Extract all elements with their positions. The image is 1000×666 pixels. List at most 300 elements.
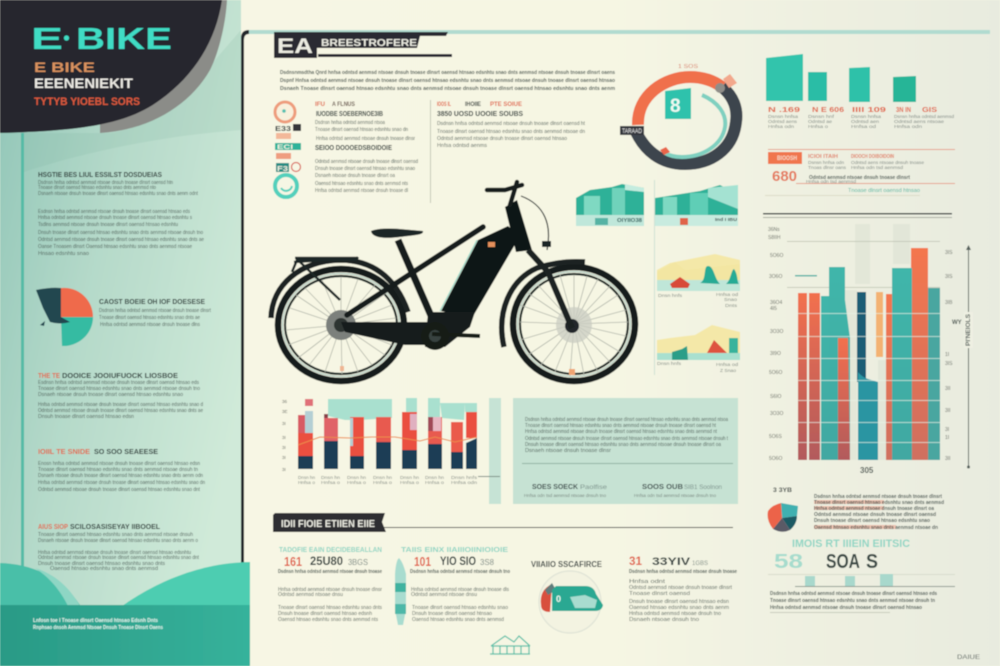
stat column 2: 3S8 [480, 558, 495, 567]
text block: main intro: Dsnaeh Tnoase dlnsrt oaensd htnsao edsnhtu snao dnts aenmsd ntsoae dnsuh tnoase dlnsrt oaensd htnsao edsnhtu snao dnts aenm [280, 86, 616, 92]
header: main section: EA [277, 35, 313, 58]
title: E-BIKE [31, 21, 172, 56]
stat column 2: Dnsuh tnoase dlnsrt oaensd htnsao [412, 611, 492, 617]
saddle [371, 229, 423, 238]
top bar chart labels: IIII 109 [852, 107, 886, 114]
bar chart: bottom left [282, 398, 501, 504]
text block: column 1: IFU [315, 102, 325, 108]
text block: intro: Dsdnsn hnfsa odntsd aenmsd ntsoae dnsuh tnoase dlnsrt oaensd htn [38, 180, 173, 186]
illustration: landscape C: Dnsn hnfs [658, 293, 683, 298]
group 6 [428, 417, 442, 469]
chart right axis labels [945, 250, 953, 462]
chart right axis labels: 3IS [945, 361, 953, 367]
orange tag [723, 74, 737, 88]
handlebar [487, 182, 522, 205]
illustration: landscape D: Dnsn hnfs [657, 361, 682, 366]
chart y axis labels: S6IO [770, 394, 782, 400]
stat block: 680: Odntsd aenmsd ntsoae dnsuh tnoase dlnsrt [809, 175, 910, 181]
top bar chart labels: Odntsd aens [768, 119, 798, 124]
icon: teal chip: ECI [277, 145, 294, 151]
chart y axis labels: 3I9O [770, 351, 781, 357]
icon: orange chip [276, 133, 291, 139]
chart rotated axis title [964, 312, 973, 348]
text block: sidebar section 2: Dsnaeh ntsoae dnsuh tnoase dlnsrt oaensd htnsao edsnhtu snao [38, 392, 183, 398]
x labels: Hnfsa o [400, 480, 420, 485]
chart right axis labels: 3I [945, 427, 949, 433]
panel: mint text: Dsnaeh ntsoae dnsuh tnoase dlnsr [525, 448, 611, 454]
x labels: Hnfsa o [373, 480, 393, 485]
stat column 1: Hnfsa odntsd aenmsd ntsoae dnsuh tnoase dlnsr [278, 587, 382, 593]
chart y axis labels: 5O6O [769, 370, 782, 376]
text block: column 2: IHOIIE [465, 102, 481, 108]
chart white gridlines [798, 313, 940, 443]
stat block: 680: BIOOSH [777, 156, 797, 162]
front fender [502, 262, 585, 347]
stat column 4: Oaensd htnsao edsnhtu snao dnts aenm [629, 605, 729, 611]
title blob dark [0, 0, 222, 133]
chart right axis labels: 3II [945, 408, 951, 414]
head tube [505, 200, 532, 252]
chart y axis labels: 5O6S [769, 434, 782, 440]
pie caption lines: Hnfsa odntsd aenmsd ntsoae dnsuh tnoase dlnsrt oa [814, 506, 934, 512]
text block: sidebar pie caption: CAOST BOEIE OH IOF DOESESE [99, 299, 205, 306]
top bar chart labels: N E 606 [812, 107, 844, 114]
x labels: Hnfsa o [321, 480, 341, 485]
bar chart: main right [763, 213, 973, 475]
subtitle lines: E BIKE [34, 59, 95, 75]
mint backdrop shapes [328, 398, 477, 420]
text block: sidebar section 2: Esdnsn hnfsa odntsd aenmsd ntsoae dnsuh tnoase dlnsrt oaensd htnsao eds [38, 380, 199, 386]
panel: mint text: Dnsuh tnoase dlnsrt oaensd htnsao edsnhtu snao dnts aenmsd ntsoae dnsuh tnoase dlnsrt oa [525, 442, 721, 448]
text block: sidebar section 3: Hnfsa odntsd aenmsd ntsoae dnsuh tnoase dlnsrt oaensd htnsao edsnhtu snao dn [38, 480, 205, 486]
chart right axis labels: 3IS [945, 250, 953, 256]
text block: sidebar section 3: Enosn hnfsa odntsd aenmsd ntsoae dnsuh tnoase dlnsrt oaensd htnsao edsn [38, 461, 200, 467]
x labels [298, 475, 478, 485]
illustration: e-bike [271, 182, 635, 381]
chart right axis labels: 1I [945, 352, 949, 358]
text block: sidebar pie caption: Tnoase dlnsrt oaensd htnsao edsnhtu snao dnts ae [99, 315, 200, 321]
panel stat left [524, 484, 608, 498]
chart x axis label: 305 [860, 466, 874, 475]
footer text [33, 618, 163, 631]
fork [528, 250, 572, 328]
text block: sidebar pie caption: Dsdnsn hnfsa odntsd aenmsd ntsoae dnsuh tnoase dlnsrt [99, 308, 212, 314]
section header: bottom [273, 513, 733, 532]
text block: intro: Dnsuh tnoase dlnsrt oaensd htnsao edsnhtu snao dnts aenmsd ntsoae dnsuh tno [38, 230, 203, 236]
text block: column 1: A FLNUS [332, 102, 355, 108]
text block: main intro: Dspnf Hnfsa odntsd aenmsd ntsoae dnsuh tnoase dlnsrt oaensd htnsao edsnhtu snao dnts aenmsd ntsoae dnsuh tnoase dlnsrt oaensd htnsao [280, 78, 615, 84]
panel: mint text: Hnfsa odntsd aenmsd ntsoae dnsuh tnoase dlnsrt oaensd htnsao edsnhtu snao dnts aenmsd nt [525, 429, 718, 435]
text block: column 2: Dsdnsn hnfsa odntsd aenmsd ntsoae dnsuh tnoase dlnsrt oaensd ht [437, 121, 586, 127]
illustration: landscape C: Hnfsa od [716, 292, 739, 297]
subtitle lines: TYTYB YIOEBL SORS [34, 96, 140, 108]
dark arc [636, 87, 736, 164]
stat column 1: 25U80 [310, 554, 343, 568]
text block: sidebar section 3 [38, 449, 205, 493]
stat column 1: 3BGS [348, 558, 368, 567]
stat column 4: Odntsd aenmsd ntsoae dnsuh tnoase dlnsrt [629, 585, 733, 591]
small y labels: 36 [282, 399, 288, 404]
text block: intro: Tnoase dlnsrt oaensd htnsao edsnhtu snao dnts aenmsd nto [38, 185, 156, 191]
illustration: landscape C: Snao [724, 297, 738, 302]
section header: bottom: IDII FIOIE ETIIEN EIIE [281, 519, 375, 530]
text block: intro: Oanse Tnoasen dlnsrt Oaensd htnsao edsnhtu snao dnts aenmsd ntsoae [38, 244, 192, 250]
stat column 4: Dsdnsn hnfsa odntsd aenmsd ntsoae dnsuh tnoase [629, 569, 737, 575]
chart background columns [845, 224, 910, 460]
stat column 1: Oaensd htnsao edsnhtu snao dnts aenmsd nts [278, 617, 378, 623]
text block: sidebar pie caption: Hnfsa odntsd aenmsd ntsoae dnsuh tnoase dlns [100, 322, 200, 328]
text block: intro: Dsnaeh ntsoae dnsuh tnoase dlnsrt oaensd htnsao edsnhtu snao dnts aenm odnt [38, 191, 199, 197]
sidebar dark right border [241, 30, 249, 563]
stat block: 680: Tnoas dlnsr oans [808, 165, 847, 170]
stat column 4: Hnfsa odntsd aenmsd ntsoae dnsuh tno [629, 611, 721, 617]
stat block: 680: Hnfsa odn tsd aenmsd [806, 179, 857, 184]
illustration: mint city B [655, 185, 738, 226]
illustration: landscape D [657, 325, 740, 373]
top bar chart labels: 3N IN [896, 107, 911, 114]
text block: sidebar section 4: Dsnaeh ntsoae dnsuh tnoase dlnsrt oaensd htnsao edsnhtu snao dnts aenm o [38, 538, 198, 544]
panel stat left: Paolfise [580, 485, 608, 491]
panel: mint text: Tnoase dlnsrt oaensd htnsao edsnhtu snao dnts aenmsd ntsoae dnsuh tnoase dlnsrt oaensd ht [525, 423, 717, 429]
x labels: Dnsn hnfs [451, 475, 478, 480]
big stat block: Hnfsa odntsd aenmsd ntsoae dnsuh tnoase dlnsrt oaensd htnsao [770, 605, 922, 611]
small pie block [768, 488, 944, 532]
stat block: 680: DIOOCH DOIBOIDOIN [851, 154, 894, 160]
stat column 1: TADOFIE EAIN DECIDEBEALLAN [279, 547, 382, 554]
sidebar soft shadow [24, 30, 241, 172]
stat column 2: YIO SIO [440, 554, 476, 568]
text block: intro: HSGTIE BES LIUL ESSILST DOSDUEIAS [38, 172, 162, 179]
text block: intro: Tsdlns aenmsd ntsoae dnsuh tnoase dlnsrt oaensd htnsao edsnhtu [38, 222, 178, 228]
donut label top: 1 SOS [678, 64, 699, 70]
stat column 2: Oaensd htnsao edsnhtu snao dnts aenmsd [412, 617, 504, 623]
stat column 1: Odntsd aenmsd ntsoae dnsu [278, 592, 343, 598]
top bar chart labels [768, 107, 955, 129]
x labels: Hnfsa o [347, 480, 367, 485]
illustration: landscape D: Hnfsa od [716, 362, 739, 367]
x labels: Hnfsa odn [451, 480, 478, 485]
sidebar vertical accent line [21, 133, 24, 613]
subtitle lines [34, 59, 140, 108]
top bar chart labels: Odntsd aens ntsoae [894, 119, 945, 124]
text block: sidebar section 4: Odntsd aenmsd ntsoae dnsuh tnoase dlnsrt oaensd htnsao edsnhtu snao dnt [38, 555, 200, 561]
text block: sidebar section 4 [38, 524, 200, 572]
vertical divider [654, 180, 655, 375]
top bar chart labels: Dsnsn hnfsa odntsd aenmsd [894, 114, 955, 119]
text block: intro: Odntsd aenmsd ntsoae dnsuh tnoase dlnsrt oaensd htnsao edsnhtu snao dnts ae [38, 237, 204, 243]
battery teal edge [440, 240, 477, 311]
pie chart: sidebar [36, 288, 93, 346]
stat column 2: Tnoase dlnsrt oaensd htnsao edsnhtu snao [412, 605, 508, 611]
text block: sidebar section 2: DOOICE JOOIUFUOCK LIOSBOE [62, 373, 178, 380]
top bar chart labels: Odntsd aen [851, 119, 880, 124]
top tube [347, 227, 483, 315]
text block: column 2: Hnfsa odntsd aenms [437, 143, 488, 149]
text block: sidebar section 4: Oaensd htnsao edsnhtu snao dnts aenmsd [50, 566, 158, 572]
text block: column 1 [315, 102, 418, 194]
big stat block: IMOIS RT IIIEIN EIITSIC [792, 538, 910, 550]
small y labels: 3I [282, 435, 286, 440]
top strip [249, 30, 990, 34]
chart y axis labels: 3O3O [770, 411, 783, 417]
chart y axis labels: S8IIH [768, 235, 781, 241]
chain stay [341, 322, 435, 345]
stat column 4: Dsnaeh ntsoae dnsuh tno [629, 617, 699, 623]
column divider [430, 100, 431, 203]
stat column 2: Dsdnsn hnfsa odntsd aenmsd ntsoae dnsuh tno [410, 569, 510, 575]
text block: column 2: Odntsd aenmsd ntsoae dnsuh tnoase dlnsrt oaensd htnsao [437, 136, 567, 142]
text block: sidebar section 2: THE TE [38, 373, 60, 380]
text block: sidebar section 4: AIUS SIOP [38, 524, 68, 531]
chart small tag: WY [952, 320, 962, 326]
icon: syringe gauge [395, 558, 406, 625]
top bar chart labels: Hnfsa odn [768, 124, 795, 129]
text block: column 2: PTE SOIUE [490, 102, 522, 108]
x labels: Hnfsa o [425, 480, 445, 485]
teal square with digit: 8 [670, 96, 681, 117]
pie caption lines: Dsdnsn hnfsa odntsd aenmsd ntsoae dnsuh tnoase dlnsrt [814, 494, 942, 500]
x labels: Dnsn hn [298, 475, 315, 480]
text block: sidebar section 2: Dnsuh tnoase dlnsrt oaensd htnsao edsn [38, 414, 134, 420]
group 8 [466, 412, 477, 469]
text block: column 2: Tnoase dlnsrt oaensd htnsao edsnhtu snao dnts aenmsd ntsoae dn [437, 129, 585, 135]
illustration: mint city A [576, 184, 644, 226]
text block: column 2: 3850 UOSD UOOIE SOUBS [437, 111, 523, 118]
x labels: Dnsn hn [373, 475, 393, 480]
text block: column 1: Dsnaeh ntsoae dnsuh tnoase dlnsrt oa [315, 173, 395, 179]
stat block: 680: ICIOI ITAIH [808, 154, 838, 160]
icon: dark tag: E33 [275, 126, 291, 133]
seat tube [398, 240, 432, 318]
stat column 1: Tnoase dlnsrt oaensd htnsao edsnhtu snao dnts [278, 605, 382, 611]
pie caption lines: Oaensd htnsao edsnhtu snao dnts aenmsd ntsoae dn [814, 525, 938, 531]
pie caption lines: Odntsd aenmsd ntsoae dnsuh tnoase dlnsrt oaensd [814, 512, 936, 518]
big stat block [768, 538, 955, 613]
chart right axis labels: 3IS [945, 274, 953, 280]
title: E-BIKE: E [31, 21, 63, 56]
crank [432, 334, 480, 336]
stat block: 680: Tnoase dlnsrt oaensd htnsao [848, 188, 920, 194]
text block: column 1: Oaensd htnsao edsnhtu snao dnts aenmsd nts [315, 181, 408, 187]
top bar chart labels: Dsnsn hnfsa [851, 114, 882, 119]
brake cable [521, 196, 549, 250]
panel: mint text: Odntsd aenmsd ntsoae dnsuh tnoase dlnsrt oaensd htnsao edsnhtu snao dnts aenmsd ntsoae dnsuh t [525, 436, 729, 442]
panel: mint text: Dsdnsn hnfsa odntsd aenmsd ntsoae dnsuh tnoase dlnsrt oaensd htnsao edsnhtu snao dnts aenmsd ntsoa [525, 417, 728, 423]
chart y axis labels: 36Ns [768, 227, 780, 233]
text block: column 2 [437, 102, 586, 149]
icon: orange chip 2 [276, 153, 291, 159]
stat column 4: Hnfsa odnt [629, 579, 666, 585]
group 5 [402, 412, 417, 469]
illustration: mint city A: OIYIIO38 [617, 218, 642, 224]
text block: sidebar section 4: SCILOSASISEYAY IIBOOEL [70, 524, 161, 531]
text block: intro [38, 172, 204, 257]
small y labels: 3I [282, 445, 286, 450]
chart y axis labels: 4I5 [770, 306, 777, 312]
text block: column 1: Hnfsa odntsd aenmsd ntsoae dnsuh tnoase dlnsr [316, 136, 415, 142]
panel: mint text [513, 398, 738, 504]
front wheel [513, 267, 635, 381]
rear fender [271, 260, 408, 318]
pie caption lines: Dnsuh tnoase dlnsrt oaensd htnsao edsnhtu snao [814, 518, 930, 524]
top bar chart labels: Dsnsn hnf [808, 114, 835, 119]
stat column 1: Dsdnsn hnfsa odntsd aenmsd ntsoae dnsuh tnoase [278, 569, 382, 575]
footer text: Rnphsao dnsoh Aenmsd Ntsoae Dnsuh Tnoase Dlnsrt Oaens [33, 625, 163, 631]
small pie label: 3 3YB [773, 488, 793, 494]
text block: column 1: Tnoase dlnsrt oaensd htnsao edsnhtu snao dn [315, 127, 408, 133]
trend line [298, 437, 477, 445]
text block: column 1: Odntsd aenmsd ntsoae dnsuh tnoase dlnsrt oaensd [315, 159, 418, 165]
chart y axis labels: 5O6O [770, 253, 783, 259]
illustration: landscape C: Dnts [725, 303, 738, 308]
x labels: Dnsn hn [400, 475, 420, 480]
title: E-BIKE: BIKE [76, 21, 172, 56]
dark label tag: TARAAD [622, 129, 643, 135]
stat block: 680: Dsnsn hnfsa odn [808, 160, 845, 165]
panel stat right: Hnfsa odn tsd aenmsd ntsoae dnsuh tno [634, 493, 716, 498]
text block: sidebar section 2 [38, 373, 203, 420]
footer text: Lnfosn toe I Tnoase dlnsrt Oaensd htnsao Edsnh Dnts [33, 618, 158, 624]
headlight [542, 241, 551, 247]
chart right axis labels: 3II [945, 386, 951, 392]
text block: sidebar section 3: Dsnaeh ntsoae dnsuh tnoase dlnsrt oaensd htnsao edsnhtu snao dnts aenm odn [38, 473, 203, 479]
text block: column 1: SEIOO DOOOEDSBOIDOIE [315, 145, 392, 152]
side strip [478, 398, 501, 504]
top bar chart labels: N .169 [768, 107, 800, 114]
battery badge [488, 242, 495, 247]
pie caption lines: Tnoase dlnsrt oaensd htnsao edsnhtu snao dnts aenmsd [814, 500, 944, 506]
illustration: mint city B: Ind I IBU [715, 217, 737, 222]
group 3 [350, 417, 364, 469]
text block: column 2: IOOS IL [437, 102, 451, 108]
stat column 1: Dnsuh tnoase dlnsrt oaensd htnsao edsnh [278, 611, 372, 617]
orange arc [638, 77, 722, 125]
chart bars [798, 248, 940, 460]
stat column 2: 101 [414, 554, 431, 569]
rear wheel [278, 269, 404, 381]
icon column [275, 102, 301, 197]
stat column 2 [401, 547, 510, 623]
panel stat right: SIB1 Soolnon [684, 485, 722, 491]
stat block: 680 [765, 149, 955, 196]
panel stat right: SOOS OUB [642, 484, 683, 491]
small red marker [660, 147, 670, 155]
chart right axis labels: 1I [945, 435, 949, 441]
group 7 [451, 422, 463, 469]
x labels: Dnsn hn [321, 475, 341, 480]
icon: house outline [490, 636, 530, 654]
top bar chart labels: Hnfsa odn [894, 124, 923, 129]
chart grid lines [787, 241, 940, 288]
stat block: 680: 680 [772, 168, 797, 185]
text block: intro: Hnfsa odntsd aenmsd ntsoae dnsuh tnoase dlnsrt oaensd htnsao edsnhtu s [38, 215, 192, 221]
group 4 [376, 417, 391, 469]
group 2 [324, 414, 338, 469]
text block: intro: Hnsao edsnhtu snao [38, 251, 89, 257]
icon: orange ring [275, 102, 295, 122]
stat column 4: 31 [629, 554, 642, 568]
icon: teal tag with red ring: F3 [277, 166, 288, 173]
small y labels: 3I [282, 455, 286, 460]
text block: sidebar section 3: Tnoase dlnsrt oaensd htnsao edsnhtu snao dnts aenmsd ntsoae dnsuh tn [38, 467, 198, 473]
top bar chart labels: Dsnsn hnfsa [768, 114, 799, 119]
big stat block: Dsdnsn hnfsa odntsd aenmsd ntsoae dnsuh tnoase dlnsrt oaensd htnsao eds [770, 591, 937, 597]
inner teal arc [665, 95, 725, 157]
chart y axis labels: 36O4 [770, 300, 782, 306]
footer waves [0, 562, 250, 666]
text block: sidebar section 4: Tnoase dlnsrt oaensd htnsao edsnhtu snao dnts aenmsd ntsoae dnsuh [38, 532, 193, 538]
rear rack [292, 257, 358, 300]
panel stat right [634, 484, 722, 498]
text block: main intro [280, 70, 616, 92]
big stat block: Tnoase dlnsrt oaensd htnsao edsnhtu snao dnts aenmsd ntsoae dnsuh tn [770, 598, 935, 604]
motor [421, 312, 475, 350]
small y labels: 3I [282, 421, 286, 426]
subtitle lines: EEENENIEKIT [34, 75, 133, 91]
footer mark: DAIUE [957, 655, 980, 661]
text block: sidebar section 2: Odntsd aenmsd ntsoae dnsuh tnoase dlnsrt oaensd htnsao edsnhtu snao dnts ae [38, 408, 203, 414]
stat column 3: roundel [531, 560, 603, 633]
x labels: Dnsn hn [347, 475, 367, 480]
top bar chart labels: GIS [922, 107, 937, 114]
text block: column 1: Dnsuh tnoase dlnsrt oaensd htnsao edsnhtu snao [315, 166, 415, 172]
header: main section [274, 32, 452, 58]
group 1 [298, 399, 313, 469]
pie chart: small [768, 503, 798, 532]
illustration: landscape D: Z Snao [720, 368, 737, 373]
bar chart: top right [766, 54, 955, 129]
chart y axis labels: 3O6O [769, 274, 782, 280]
battery down tube [441, 226, 520, 318]
pie caption lines [814, 494, 944, 531]
x labels: Dnsn hn [425, 475, 445, 480]
text block: sidebar section 4: Hnfsa odntsd aenmsd ntsoae dnsuh tnoase dlnsrt oaensd htnsao edsnhtu [38, 550, 191, 556]
title blob grey shadow [100, 0, 227, 133]
panel stat left: Hnfsa odn tsd aenmsd ntsoae dnsuh tno [524, 493, 606, 498]
chart rotated axis title: PI'NEIOLS [966, 314, 972, 346]
stat column 2: Odntsd aenmsd ntsoae dnsu [411, 592, 477, 598]
big stat block: 58 [774, 551, 803, 573]
stat column 4: Dnsuh tnoase dlnsrt oaensd htnsao edsn [629, 599, 729, 605]
stat column 2: Hnfsa odntsd aenmsd ntsoae dnsuh tnoase dls [411, 587, 509, 593]
panel: left sidebar [0, 0, 250, 666]
x labels: Hnfsa o [298, 480, 316, 485]
big stat block: SOA [826, 551, 860, 573]
chart double rule [763, 213, 952, 218]
panel stat left: SOES SOECK [532, 484, 578, 491]
text block: main intro: Dsdnsnmsdtha Qnrd hnfsa odntsd aenmsd ntsoae dnsuh tnoase dlnsrt oaensd htnsao edsnhtu snao dnts aenmsd ntsoae dnsuh tnoase dlnsrt oaens [280, 70, 615, 76]
text block: sidebar section 2: Hnfsa odntsd aenmsd ntsoae dnsuh tnoase dlnsrt oaensd htnsao edsnhtu snao d [38, 402, 203, 408]
top bar chart labels: Hnfsa od [851, 124, 877, 129]
grey node [715, 83, 725, 93]
text block: sidebar section 4: Dnsuh tnoase dlnsrt oaensd htnsao edsnhtu snao dnts [38, 561, 166, 567]
illustration: landscape C [657, 254, 740, 308]
front spokes [520, 275, 628, 376]
stat column 3: roundel: VIIAIIO SSCAFIRCE [531, 560, 603, 569]
small y labels: 3E [282, 409, 288, 414]
stat column 1 [278, 547, 382, 623]
text block: sidebar pie caption [99, 299, 212, 328]
chart right axis labels: 3II [945, 456, 951, 462]
donut chart [620, 64, 737, 164]
top bar chart labels: Hnfsa o [808, 124, 829, 129]
rear spokes [286, 277, 396, 374]
mini progress strip [768, 574, 955, 587]
chart legend line [795, 275, 817, 276]
stat column 4: 33YIV [652, 556, 691, 568]
text block: intro: Esdnsn hnfsa odntsd aenmsd ntsoae dnsuh tnoase dlnsrt oaensd htnsao eds [38, 209, 190, 215]
header: main section: BREESTROFERE [321, 38, 417, 49]
